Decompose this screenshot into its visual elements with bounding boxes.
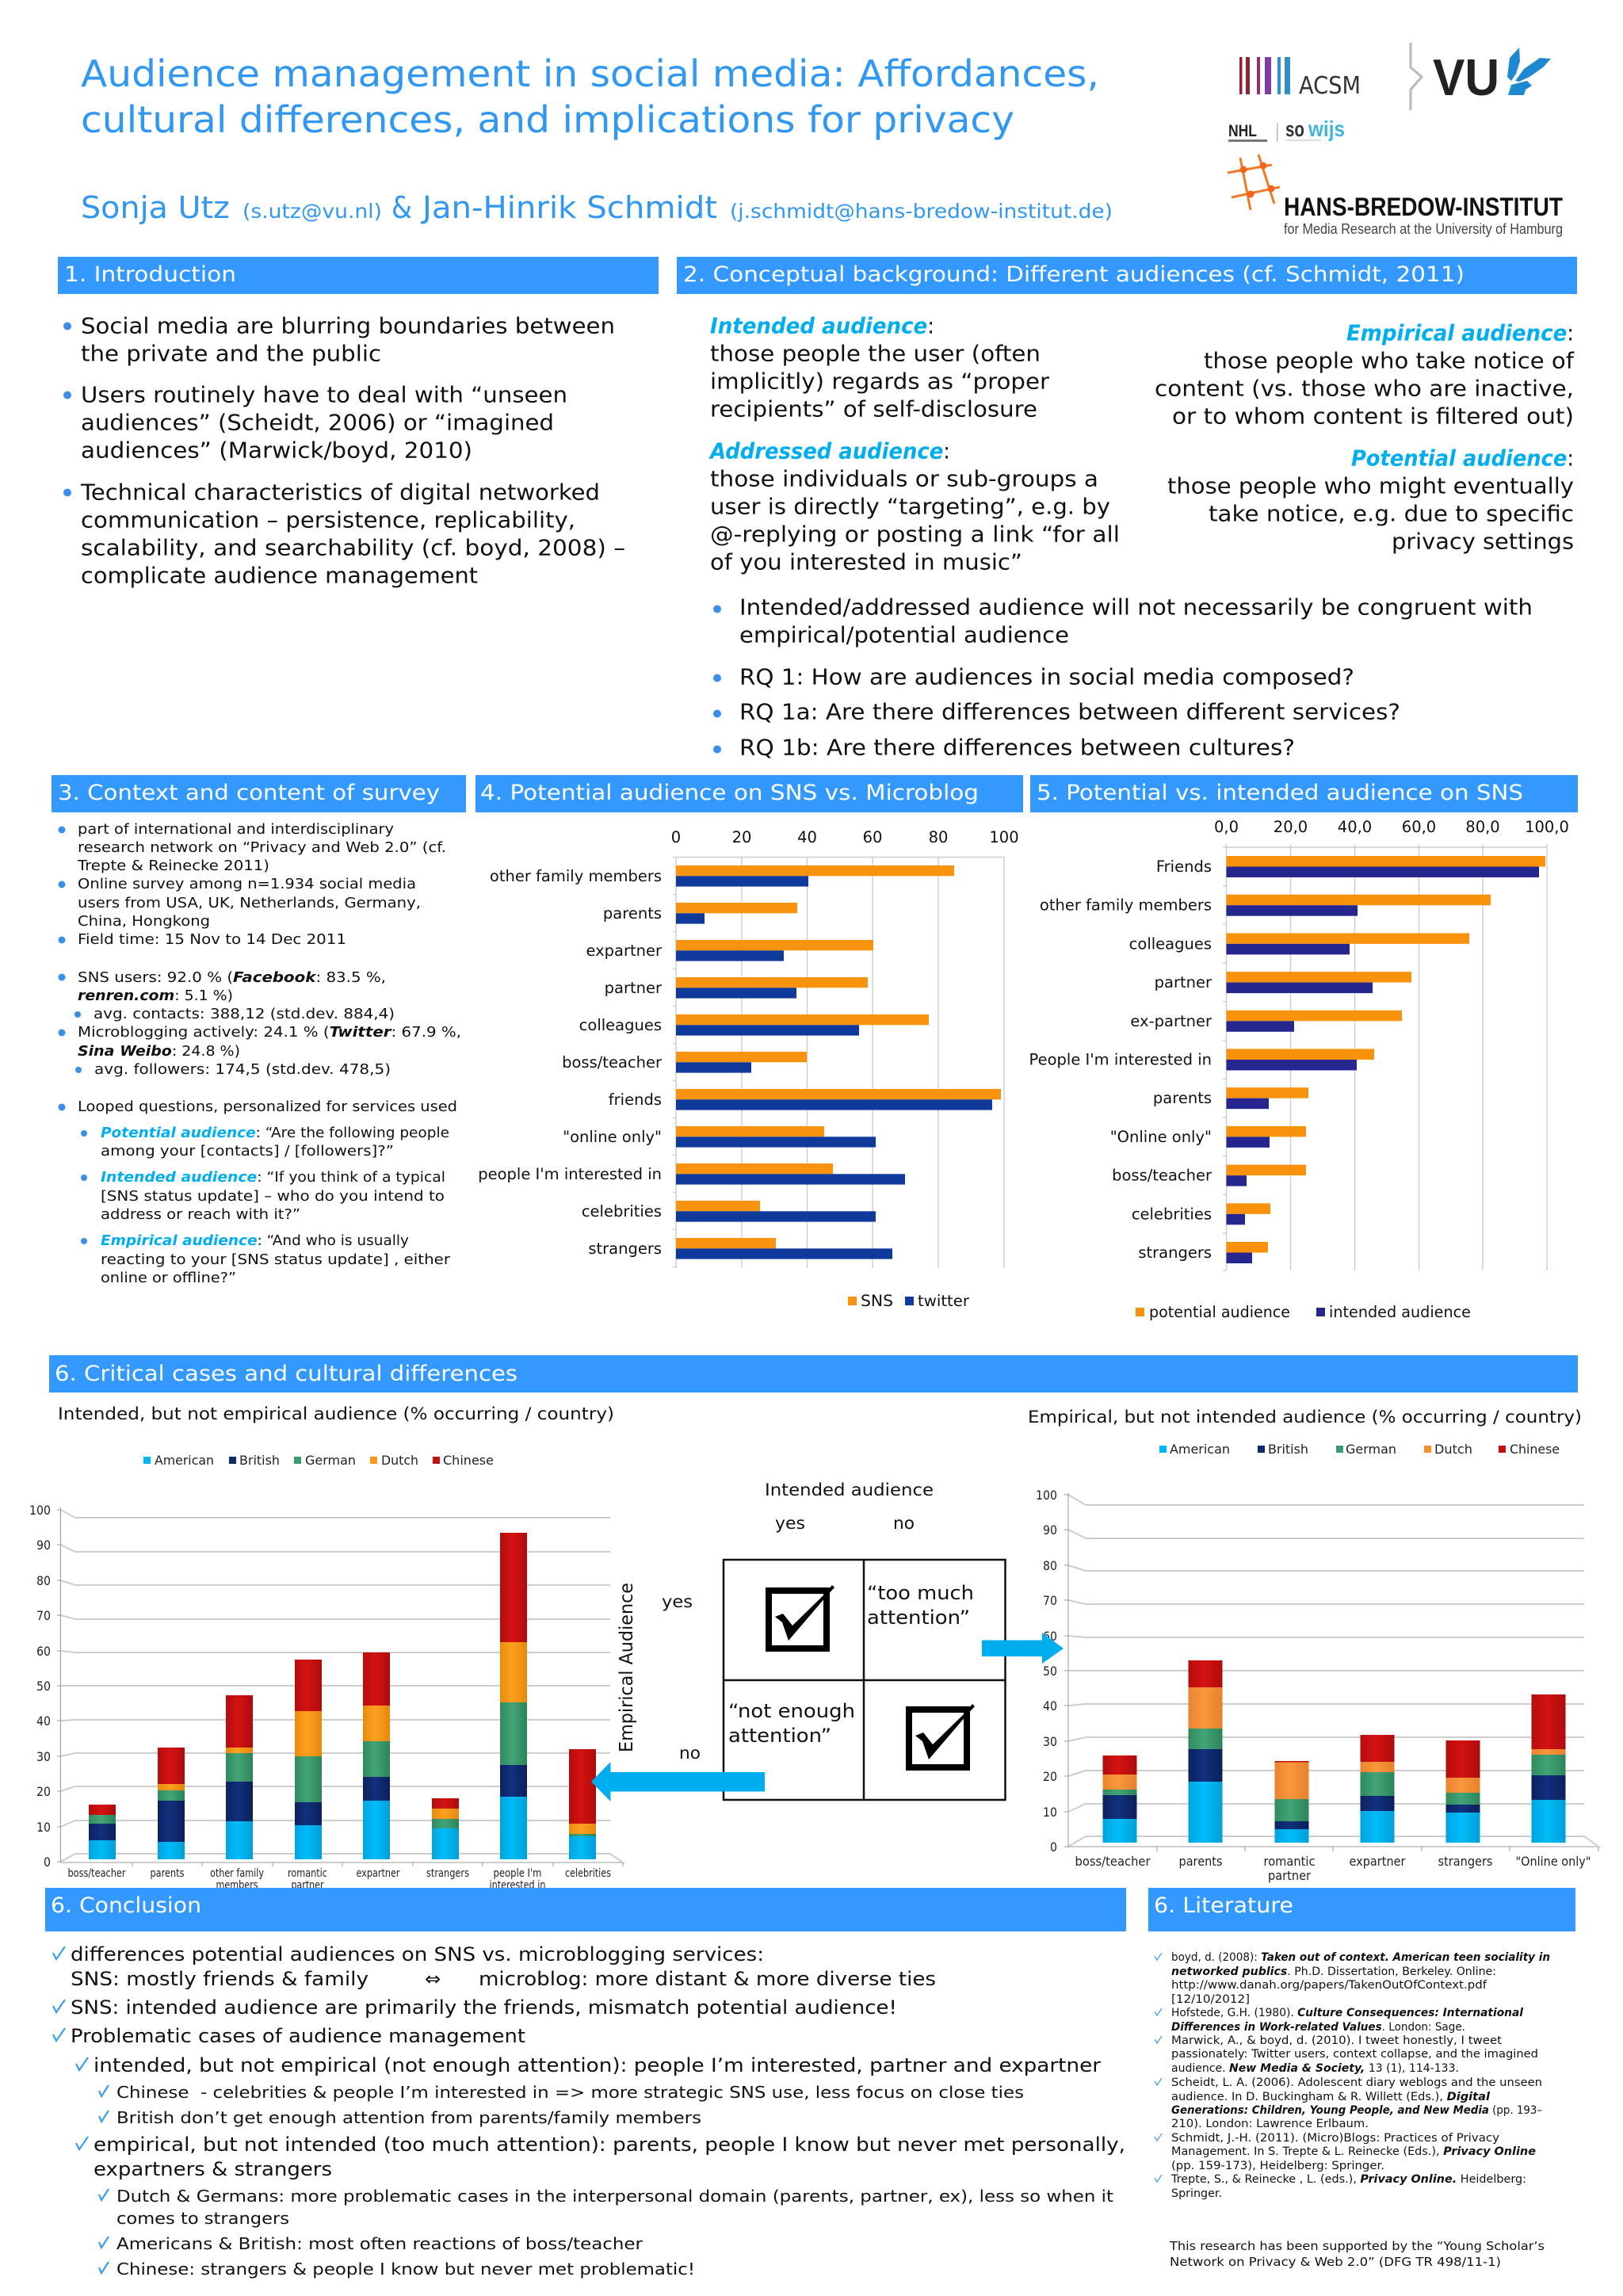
bar chart: SNS vs twitter: "online only": [563, 1128, 662, 1146]
bullet text: introduction: audiences” (Marwick/boyd, 2010): [81, 437, 472, 463]
bullet text: survey details: [59, 821, 461, 1286]
heading: literature: [1148, 1888, 1575, 1931]
text: references: 210). London: Lawrence Erlbaum.: [1171, 2118, 1369, 2130]
bullet text: introduction: scalability, and searchability (cf. boyd, 2008) –: [81, 536, 625, 561]
bullet text: introduction: Social media are blurring boundaries between: [81, 314, 615, 339]
stacked bar chart: intended but not empirical: other family: [210, 1867, 264, 1880]
text: references: Differences in Work-related Values. London: Sage.: [1171, 2021, 1465, 2034]
bar chart: potential vs intended: partner: [1155, 973, 1212, 991]
text: conclusion findings: SNS: intended audience are primarily the friends, mismatch potential audience!: [71, 1996, 897, 2019]
stacked bar chart: empirical but not intended: 40: [1043, 1698, 1057, 1713]
matrix grid: [724, 1560, 1005, 1800]
bullet text: survey details: among your [contacts] / [followers]?”: [101, 1143, 394, 1159]
stacked bar chart: empirical but not intended: 10: [1043, 1805, 1057, 1820]
bullet text: research questions: RQ 1b: Are there differences between cultures?: [739, 735, 1295, 761]
legend: right chart: [1159, 1442, 1560, 1457]
text: conclusion findings: Americans & British: most often reactions of boss/teacher: [116, 2234, 643, 2253]
text: conclusion findings: empirical, but not intended (too much attention): parents, people I know but never met personally,: [94, 2134, 1125, 2156]
bar chart: SNS vs twitter: 80: [929, 828, 948, 846]
stacked bar chart: empirical but not intended: 90: [1043, 1522, 1057, 1538]
matrix column labels: Intended audience: [765, 1480, 934, 1500]
bar chart: potential vs intended: parents: [1153, 1089, 1212, 1107]
icon: check box top left: [769, 1585, 834, 1648]
bullet text: introduction: [63, 314, 625, 588]
authors: &: [391, 190, 412, 225]
text: not enough attention: [728, 1700, 855, 1747]
heading: conclusion: 6. Conclusion: [51, 1893, 201, 1918]
logo: ACSM: [1239, 57, 1361, 100]
stacked bar chart: intended but not empirical: parents: [151, 1867, 184, 1880]
legend: right chart: American: [1170, 1442, 1230, 1457]
stacked bar chart: intended but not empirical: 30: [36, 1749, 51, 1764]
bullet text: research questions: RQ 1a: Are there differences between different services?: [739, 699, 1400, 724]
text: empirical audience: those people who take notice of: [1204, 349, 1575, 374]
text: conclusion findings: British don’t get enough attention from parents/family members: [116, 2108, 701, 2127]
bar chart: SNS vs twitter: 0: [671, 828, 681, 846]
bar chart: potential vs intended: colleagues: [1129, 934, 1212, 953]
text: too much attention: [867, 1582, 974, 1629]
bar chart: potential vs intended: 100,0: [1525, 818, 1569, 836]
bar chart: potential vs intended: Friends: [1156, 858, 1212, 876]
bar chart: SNS vs twitter: celebrities: [582, 1202, 662, 1221]
legend: left chart: American: [155, 1453, 214, 1468]
stacked bar chart: intended but not empirical: 50: [36, 1679, 51, 1694]
legend: right chart: Chinese: [1510, 1442, 1560, 1457]
stacked bar chart: intended but not empirical: 80: [36, 1573, 51, 1588]
stacked bar chart: empirical but not intended: expartner: [1349, 1854, 1406, 1869]
legend: left chart: British: [239, 1453, 280, 1468]
bullet text: introduction: Users routinely have to deal with “unseen: [81, 382, 567, 407]
bullet text: survey details: Microblogging actively: 24.1 % ( Twitter : 67.9 %,: [78, 1024, 461, 1041]
stacked bar chart: empirical but not intended: 70: [1043, 1593, 1057, 1608]
text: references: networked publics. Ph.D. Dissertation, Berkeley. Online:: [1171, 1966, 1496, 1978]
legend: potential vs intended: [1136, 1303, 1471, 1321]
text: conclusion findings: Dutch & Germans: more problematic cases in the interpersonal domain (parents, partner, ex), less so when it: [116, 2187, 1113, 2206]
bullet text: survey details: [SNS status update] – who do you intend to: [101, 1188, 445, 1205]
bar chart: potential vs intended: 0,0: [1214, 818, 1239, 836]
text: conclusion findings: ⇔: [425, 1968, 441, 1990]
text: addressed audience: [708, 439, 1120, 575]
text: empirical audience: [1155, 320, 1575, 430]
heading: context and content of survey: [52, 775, 466, 812]
bullet text: survey details: online or offline?”: [101, 1270, 236, 1286]
heading: conceptual background: 2. Conceptual background: Different audiences (cf. Schmidt, 2011): [683, 262, 1465, 287]
authors: (j.schmidt@hans-bredow-institut.de): [730, 200, 1113, 223]
bullet text: survey details: avg. followers: 174,5 (std.dev. 478,5): [94, 1061, 391, 1078]
bar chart: potential vs intended: "Online only": [1110, 1128, 1212, 1146]
bar chart: potential vs intended: ex-partner: [1130, 1012, 1212, 1030]
text: empirical audience: Empirical audience:: [1346, 320, 1574, 346]
text: funding acknowledgement: This research has been supported by the “Young Scholar’s: [1169, 2239, 1545, 2253]
legend: SNS vs twitter: twitter: [918, 1292, 970, 1310]
bullet text: introduction: complicate audience management: [81, 563, 478, 588]
stacked bar chart: empirical but not intended: 30: [1043, 1734, 1057, 1749]
text: potential audience: Potential audience:: [1351, 445, 1574, 471]
text: conclusion findings: microblog: more distant & more diverse ties: [479, 1968, 936, 1990]
text: references: http://www.danah.org/papers/TakenOutOfContext.pdf: [1171, 1979, 1487, 1992]
text: addressed audience: of you interested in music”: [710, 550, 1022, 575]
text: conclusion findings: Chinese - celebrities & people I’m interested in => more strategic SNS use, less focus on close ties: [116, 2083, 1024, 2102]
bar chart: potential vs intended: celebrities: [1132, 1205, 1212, 1223]
text: intended audience: Intended audience:: [710, 314, 934, 339]
panel: conclusion: [45, 1888, 1126, 2279]
bar chart: potential vs intended: boss/teacher: [1112, 1167, 1212, 1185]
logo: NHL sowijs: NHL: [1228, 122, 1257, 140]
text: references: (pp. 159-173), Heidelberg: Springer.: [1171, 2160, 1384, 2172]
panel: introduction: [58, 257, 659, 588]
legend: right chart: German: [1346, 1442, 1396, 1457]
bullet text: survey details: part of international and interdisciplinary: [78, 821, 394, 838]
text: references: Hofstede, G.H. (1980). Culture Consequences: International: [1171, 2007, 1524, 2019]
logo: NHL sowijs: wijs: [1308, 117, 1345, 141]
bar chart: SNS vs twitter: partner: [605, 979, 663, 997]
text: intended audience: those people the user (often: [710, 341, 1041, 366]
stacked bar chart: empirical but not intended: [1036, 1488, 1598, 1883]
bullet text: survey details: Online survey among n=1.934 social media: [78, 876, 416, 892]
bar chart: SNS vs twitter: 40: [797, 828, 817, 846]
bullet text: survey details: China, Hongkong: [78, 913, 210, 930]
text: empirical audience: content (vs. those who are inactive,: [1155, 376, 1574, 401]
subtitle: intended but not empirical: Intended, but not empirical audience (% occurring / country): [58, 1404, 614, 1424]
stacked bar chart: empirical but not intended: partner: [1268, 1868, 1311, 1883]
text: not enough attention: attention”: [728, 1725, 831, 1747]
bar chart: SNS vs twitter: 60: [863, 828, 882, 846]
matrix row labels: Empirical Audience: [615, 1583, 637, 1752]
text: conclusion findings: intended, but not empirical (not enough attention): people I’m interested, partner and expartner: [94, 2054, 1101, 2076]
bullet text: survey details: Empirical audience : “And who is usually: [101, 1232, 409, 1249]
title: cultural differences, and implications for privacy: [81, 98, 1014, 141]
heading: literature: 6. Literature: [1154, 1893, 1293, 1918]
panel: literature: [1148, 1888, 1575, 2269]
stacked bar chart: empirical but not intended: 60: [1043, 1629, 1057, 1644]
heading: potential audience on SNS vs microblog: 4. Potential audience on SNS vs. Microblog: [480, 781, 979, 805]
text: empirical audience: or to whom content is filtered out): [1172, 404, 1574, 430]
bullet text: research questions: RQ 1: How are audiences in social media composed?: [739, 664, 1354, 690]
text: addressed audience: Addressed audience:: [708, 439, 950, 464]
legend: left chart: Dutch: [381, 1453, 418, 1468]
text: potential audience: [1167, 445, 1574, 555]
bar chart: potential vs intended: strangers: [1138, 1244, 1212, 1262]
bar chart: SNS vs twitter: people I'm interested in: [478, 1165, 662, 1183]
text: references: audience. In D. Buckingham & R. Willett (Eds.), Digital: [1171, 2091, 1491, 2103]
matrix column labels: yes: [775, 1514, 805, 1534]
bullet text: introduction: audiences” (Scheidt, 2006) or “imagined: [81, 411, 554, 436]
text: funding acknowledgement: [1169, 2239, 1545, 2269]
logo: NHL sowijs: so: [1285, 117, 1304, 141]
stacked bar chart: intended but not empirical: boss/teacher: [68, 1867, 126, 1880]
text: references: Scheidt, L. A. (2006). Adolescent diary weblogs and the unseen: [1171, 2076, 1542, 2089]
heading: critical cases: 6. Critical cases and cultural differences: [55, 1362, 517, 1386]
text: references: Springer.: [1171, 2187, 1222, 2200]
heading: conceptual background: [677, 257, 1577, 294]
text: intended audience: [710, 314, 1050, 422]
legend: potential vs intended: intended audience: [1329, 1303, 1471, 1321]
stacked bar chart: empirical but not intended: 80: [1043, 1558, 1057, 1573]
bullet text: survey details: Field time: 15 Nov to 14 Dec 2011: [78, 931, 346, 948]
heading: potential vs intended audience on SNS: 5. Potential vs. intended audience on SNS: [1037, 781, 1523, 805]
text: addressed audience: @-replying or posting a link “for all: [710, 521, 1120, 547]
text: references: audience. New Media & Society, 13 (1), 114-133.: [1171, 2062, 1459, 2075]
bullet text: introduction: the private and the public: [81, 341, 381, 366]
stacked bar chart: empirical but not intended: boss/teacher: [1075, 1854, 1151, 1869]
bullet text: survey details: address or reach with it?”: [101, 1206, 300, 1223]
text: addressed audience: user is directly “targeting”, e.g. by: [710, 495, 1110, 520]
text: too much attention: “too much: [867, 1582, 974, 1604]
bar chart: SNS vs twitter: boss/teacher: [562, 1053, 663, 1072]
bar chart: potential vs intended: 80,0: [1465, 818, 1500, 836]
logo: NHL sowijs: [1228, 117, 1345, 142]
stacked bar chart: empirical but not intended: romantic: [1263, 1854, 1316, 1869]
heading: introduction: [58, 257, 659, 294]
bar chart: potential vs intended: [1029, 818, 1569, 1321]
authors: Sonja Utz: [81, 190, 230, 225]
bullet text: research questions: empirical/potential audience: [739, 623, 1069, 648]
stacked bar chart: intended but not empirical: members: [216, 1879, 258, 1892]
matrix row labels: [615, 1583, 701, 1763]
stacked bar chart: empirical but not intended: 100: [1036, 1488, 1057, 1503]
text: references: Schmidt, J.-H. (2011). (Micro)Blogs: Practices of Privacy: [1171, 2132, 1499, 2145]
stacked bar chart: intended but not empirical: 10: [36, 1820, 51, 1835]
legend: SNS vs twitter: [848, 1292, 970, 1310]
subtitle: empirical but not intended: Empirical, but not intended audience (% occurring / country): [1028, 1408, 1582, 1427]
text: intended audience: implicitly) regards as “proper: [710, 369, 1050, 395]
stacked bar chart: intended but not empirical: celebrities: [565, 1867, 611, 1880]
check marks: literature: [1155, 1953, 1162, 2182]
arrow: to right chart: [982, 1633, 1064, 1664]
text: conclusion findings: Problematic cases of audience management: [71, 2025, 525, 2047]
bar chart: potential vs intended: People I'm interested in: [1029, 1051, 1212, 1068]
matrix row labels: no: [679, 1744, 701, 1763]
bullet text: research questions: [713, 594, 1533, 761]
text: addressed audience: those individuals or sub-groups a: [710, 466, 1098, 491]
bar chart: SNS vs twitter: 20: [732, 828, 751, 846]
legend: left chart: [143, 1453, 494, 1468]
stacked bar chart: intended but not empirical: 70: [36, 1608, 51, 1623]
stacked bar chart: intended but not empirical: partner: [292, 1879, 324, 1892]
bullet text: introduction: Technical characteristics of digital networked: [80, 480, 600, 506]
bullet text: survey details: reacting to your [SNS status update] , either: [101, 1251, 451, 1268]
stacked bar chart: intended but not empirical: 20: [36, 1784, 51, 1799]
text: references: Management. In S. Trepte & L. Reinecke (Eds.), Privacy Online: [1171, 2145, 1536, 2158]
logo: Hans-Bredow-Institut: for Media Research at the University of Hamburg: [1284, 221, 1563, 237]
text: potential audience: those people who might eventually: [1167, 474, 1574, 499]
bullet text: survey details: Trepte & Reinecke 2011): [77, 858, 269, 874]
stacked bar chart: empirical but not intended: "Online only": [1515, 1854, 1591, 1869]
icon: check box bottom right: [909, 1704, 975, 1767]
legend: right chart: British: [1268, 1442, 1308, 1457]
arrow: to left chart: [591, 1762, 765, 1801]
text: conclusion findings: comes to strangers: [116, 2209, 289, 2228]
stacked bar chart: empirical but not intended: 50: [1043, 1664, 1057, 1679]
stacked bar chart: intended but not empirical: romantic: [288, 1867, 327, 1880]
matrix column labels: [765, 1480, 934, 1534]
heading: potential vs intended audience on SNS: [1030, 775, 1578, 812]
text: conclusion findings: differences potential audiences on SNS vs. microblogging services:: [71, 1943, 764, 1966]
title: Audience management in social media: Affordances,: [81, 52, 1099, 95]
text: conclusion findings: Chinese: strangers & people I know but never met problematic!: [116, 2260, 695, 2279]
bullet text: survey details: Sina Weibo : 24.8 %): [78, 1043, 240, 1060]
stacked bar chart: empirical but not intended: 0: [1050, 1839, 1057, 1855]
logo: VU: [1411, 43, 1551, 110]
stacked bar chart: intended but not empirical: expartner: [357, 1867, 400, 1880]
matrix: intended vs empirical audience: [591, 1480, 1064, 1801]
stacked bar chart: intended but not empirical: 0: [44, 1855, 51, 1870]
bullet text: survey details: SNS users: 92.0 % ( Facebook : 83.5 %,: [78, 969, 386, 986]
text: conclusion findings: SNS: mostly friends & family: [71, 1968, 369, 1990]
heading: potential audience on SNS vs microblog: [475, 775, 1023, 812]
stacked bar chart: intended but not empirical: strangers: [426, 1867, 469, 1880]
check marks: conclusion: [53, 1946, 109, 2273]
bar chart: SNS vs twitter: strangers: [588, 1240, 662, 1258]
legend: left chart: Chinese: [443, 1453, 494, 1468]
legend: potential vs intended: potential audience: [1149, 1303, 1290, 1321]
panel: potential vs intended audience on SNS: [1029, 775, 1578, 1321]
bullet text: research questions: Intended/addressed audience will not necessarily be congruent with: [739, 594, 1533, 620]
stacked bar chart: intended but not empirical: 90: [36, 1538, 51, 1553]
title: [81, 52, 1099, 141]
legend: left chart: German: [305, 1453, 356, 1468]
stacked bar chart: intended but not empirical: 40: [36, 1713, 51, 1729]
authors: [81, 190, 1113, 225]
text: conclusion findings: expartners & strangers: [94, 2158, 332, 2180]
bullet text: survey details: renren.com : 5.1 %): [78, 988, 233, 1004]
heading: context and content of survey: 3. Context and content of survey: [58, 781, 440, 805]
bar chart: SNS vs twitter: parents: [603, 904, 662, 923]
bullet text: survey details: avg. contacts: 388,12 (std.dev. 884,4): [94, 1006, 395, 1022]
text: references: Trepte, S., & Reinecke , L. (eds.), Privacy Online. Heidelberg:: [1170, 2173, 1526, 2186]
bullet text: survey details: users from USA, UK, Netherlands, Germany,: [78, 895, 421, 911]
text: conclusion findings: [71, 1943, 1125, 2279]
text: potential audience: privacy settings: [1392, 529, 1574, 555]
bullet text: survey details: research network on “Privacy and Web 2.0” (cf.: [78, 839, 446, 856]
text: references: Marwick, A., & boyd, d. (2010). I tweet honestly, I tweet: [1171, 2034, 1502, 2047]
bar chart: potential vs intended: 60,0: [1402, 818, 1436, 836]
text: not enough attention: “not enough: [728, 1700, 855, 1722]
panel: context and content of survey: [52, 775, 466, 1286]
panel: potential audience on SNS vs microblog: [475, 775, 1023, 1310]
bullet text: survey details: Potential audience : “Are the following people: [101, 1125, 449, 1141]
logo: ACSM: ACSM: [1299, 72, 1361, 100]
heading: critical cases: [49, 1355, 1578, 1392]
bar chart: SNS vs twitter: friends: [609, 1091, 662, 1109]
authors: (s.utz@vu.nl): [242, 200, 382, 223]
bar chart: SNS vs twitter: colleagues: [579, 1016, 662, 1034]
text: references: [1170, 1951, 1550, 2200]
matrix column labels: no: [893, 1514, 915, 1534]
text: intended audience: recipients” of self-disclosure: [710, 396, 1037, 422]
text: potential audience: take notice, e.g. due to specific: [1209, 501, 1574, 526]
matrix row labels: yes: [662, 1592, 693, 1612]
stacked bar chart: empirical but not intended: strangers: [1438, 1854, 1493, 1869]
logo: Hans-Bredow-Institut: HANS-BREDOW-INSTITUT: [1284, 193, 1563, 221]
logo: VU: VU: [1433, 48, 1499, 106]
bullet text: survey details: Looped questions, personalized for services used: [78, 1098, 457, 1115]
stacked bar chart: intended but not empirical: 60: [36, 1644, 51, 1659]
heading: conclusion: [45, 1888, 1126, 1931]
stacked bar chart: intended but not empirical: interested in: [490, 1879, 545, 1892]
bullet text: introduction: communication – persistence, replicability,: [81, 507, 575, 533]
text: references: passionately: Twitter users, context collapse, and the imagined: [1171, 2048, 1538, 2061]
stacked bar chart: intended but not empirical: [29, 1503, 623, 1892]
bar chart: potential vs intended: 40,0: [1338, 818, 1372, 836]
bar chart: potential vs intended: other family members: [1040, 896, 1212, 915]
bar chart: SNS vs twitter: [478, 828, 1019, 1310]
heading: introduction: 1. Introduction: [64, 262, 236, 287]
text: references: boyd, d. (2008): Taken out of context. American teen sociality in: [1171, 1951, 1550, 1964]
stacked bar chart: intended but not empirical: 100: [29, 1503, 51, 1518]
stacked bar chart: empirical but not intended: parents: [1179, 1854, 1222, 1869]
bullet text: survey details: Intended audience : “If you think of a typical: [101, 1169, 445, 1186]
bar chart: SNS vs twitter: expartner: [586, 942, 663, 960]
panel: critical cases and cultural differences: [29, 1355, 1598, 1892]
authors: Jan-Hinrik Schmidt: [421, 190, 717, 225]
logo: Hans-Bredow-Institut: [1228, 155, 1563, 237]
legend: right chart: Dutch: [1434, 1442, 1472, 1457]
panel: conceptual background: [677, 257, 1577, 761]
text: funding acknowledgement: Network on Privacy & Web 2.0” (DFG TR 498/11-1): [1170, 2255, 1501, 2269]
text: references: Generations: Children, Young People, and New Media (pp. 193–: [1171, 2104, 1542, 2117]
stacked bar chart: empirical but not intended: 20: [1043, 1769, 1057, 1784]
legend: SNS vs twitter: SNS: [861, 1292, 893, 1310]
stacked bar chart: intended but not empirical: people I'm: [493, 1867, 542, 1880]
bar chart: SNS vs twitter: 100: [989, 828, 1019, 846]
text: too much attention: attention”: [867, 1606, 970, 1629]
text: references: [12/10/2012]: [1171, 1993, 1250, 2006]
bar chart: SNS vs twitter: other family members: [490, 867, 662, 885]
bar chart: potential vs intended: 20,0: [1274, 818, 1308, 836]
